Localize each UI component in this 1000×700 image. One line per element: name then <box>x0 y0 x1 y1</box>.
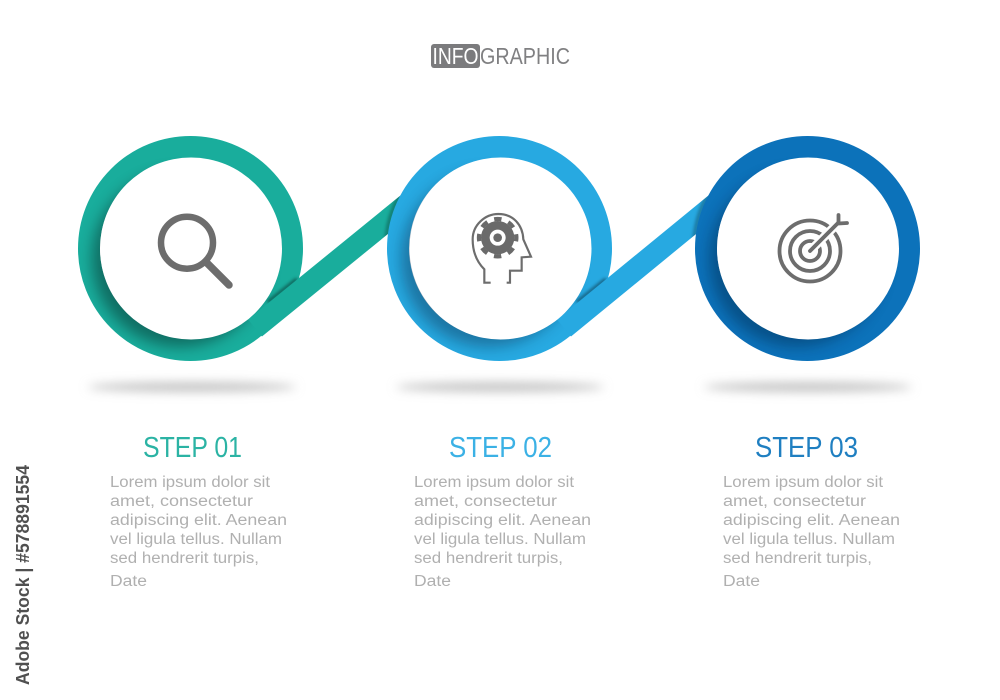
text block: step 02: amet, consectetur <box>414 493 557 510</box>
white disc: step 1 <box>100 158 282 340</box>
icon: magnifying glass <box>161 217 229 285</box>
text block: step 01: amet, consectetur <box>110 493 253 510</box>
text block: step 02: Lorem ipsum dolor sit <box>414 474 575 491</box>
text block: step 03: sed hendrerit turpis, <box>723 550 872 567</box>
text block: step 02: adipiscing elit. Aenean <box>414 512 591 529</box>
text block: step 01: sed hendrerit turpis, <box>110 550 259 567</box>
text block: step 02: vel ligula tellus. Nullam <box>414 531 586 548</box>
ground shadow: step 1 <box>88 382 296 392</box>
text block: step 03 <box>723 474 900 590</box>
text block: step 02: Date <box>414 573 451 590</box>
ground shadow: step 3 <box>704 382 912 392</box>
text block: step 02: sed hendrerit turpis, <box>414 550 563 567</box>
text block: step 03: vel ligula tellus. Nullam <box>723 531 895 548</box>
text block: step 03: amet, consectetur <box>723 493 866 510</box>
text block: step 03: Date <box>723 573 760 590</box>
heading: step 02: STEP 02 <box>449 432 552 464</box>
title: GRAPHIC <box>480 43 570 69</box>
white disc: step 2 <box>410 158 592 340</box>
text block: step 01: adipiscing elit. Aenean <box>110 512 287 529</box>
ground shadow: step 2 <box>396 382 604 392</box>
text block: step 01: Date <box>110 573 147 590</box>
ring: step 2 <box>398 147 606 350</box>
connector band: step 2 to step 3 <box>558 196 708 336</box>
text block: step 01: Lorem ipsum dolor sit <box>110 474 271 491</box>
heading: step 01: STEP 01 <box>143 432 242 464</box>
icon: target with arrow <box>780 215 847 282</box>
text block: step 03: Lorem ipsum dolor sit <box>723 474 884 491</box>
title <box>431 43 570 69</box>
ring: step 3 <box>706 147 909 350</box>
white disc: step 3 <box>717 158 899 340</box>
title: INFO <box>432 43 478 69</box>
vertical image id label: Adobe Stock | #578891554 <box>13 465 33 685</box>
connector band: step 1 to step 2 <box>248 196 400 336</box>
text block: step 01: vel ligula tellus. Nullam <box>110 531 282 548</box>
text block: step 02 <box>414 474 591 590</box>
heading: step 03: STEP 03 <box>755 432 858 464</box>
text block: step 01 <box>110 474 287 590</box>
icon: head with gear <box>473 214 531 283</box>
text block: step 03: adipiscing elit. Aenean <box>723 512 900 529</box>
ring: step 1 <box>89 147 297 350</box>
